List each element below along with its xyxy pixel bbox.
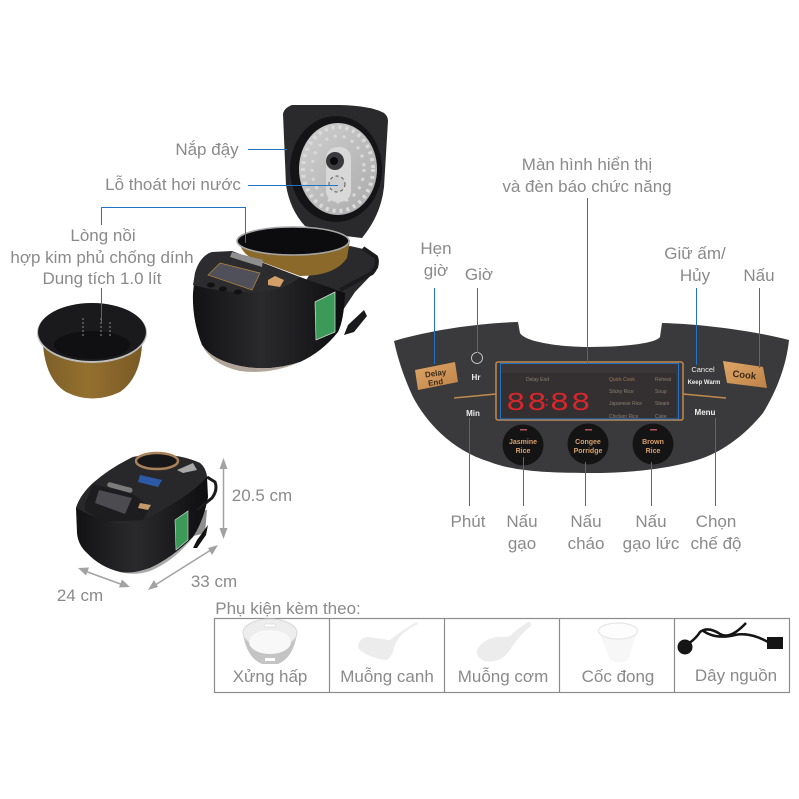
lid ring xyxy=(290,116,382,222)
accessory: power cord xyxy=(678,623,783,685)
heading: display label: Màn hình hiển thị xyxy=(522,155,652,174)
silver lock bar xyxy=(230,252,263,267)
button: delay end xyxy=(415,362,458,390)
label: min: Min xyxy=(466,409,480,418)
rear body xyxy=(300,246,378,310)
button: jasmine rice xyxy=(502,424,544,466)
green sticker xyxy=(175,511,188,550)
button: brown rice: Brown xyxy=(642,439,664,446)
labels: top control labels: Hủy xyxy=(680,266,711,285)
icon: open rice cooker xyxy=(193,105,388,372)
icon: inner pot xyxy=(37,303,147,398)
button: congee porridge: Porridge xyxy=(574,448,602,455)
heading: display label xyxy=(502,155,672,196)
labels: bottom control labels xyxy=(451,512,742,553)
label: inner pot: Lòng nồi xyxy=(70,226,136,245)
labels: top control labels xyxy=(420,239,775,285)
label: steam vent: Lỗ thoát hơi nước xyxy=(105,175,241,194)
label: hr: Hr xyxy=(472,373,480,382)
accessory: power cord: Dây nguồn xyxy=(695,666,777,685)
display labels: Cake xyxy=(655,414,667,420)
accessory: soup ladle: Muỗng canh xyxy=(340,667,434,686)
leader lines: control panel xyxy=(434,198,760,506)
labels: top control labels: giờ xyxy=(424,261,448,280)
display frame xyxy=(496,362,683,420)
seven segment readout: 8 xyxy=(550,388,569,418)
label: inner pot xyxy=(10,226,194,288)
button: delay end: Delay xyxy=(424,368,447,379)
label: lid: Nắp đậy xyxy=(175,140,239,159)
lid plate xyxy=(299,123,377,215)
labels: bottom control labels: Nấu xyxy=(635,512,667,531)
label: cancel: Cancel xyxy=(691,365,715,374)
labels: bottom control labels: cháo xyxy=(568,534,604,553)
body xyxy=(76,455,208,573)
labels: bottom control labels: chế độ xyxy=(690,534,742,553)
heading: accessories: Phụ kiện kèm theo: xyxy=(215,599,361,618)
heading: display label: và đèn báo chức năng xyxy=(502,177,672,196)
panel: control panel xyxy=(394,322,789,473)
labels: top control labels: Giờ xyxy=(465,265,493,284)
display labels: Chicken Rice xyxy=(609,414,639,420)
steam slot xyxy=(177,463,197,473)
display labels: Japanese Rice xyxy=(609,401,642,407)
side metal and plug xyxy=(190,510,207,537)
accessory: rice paddle: Muỗng cơm xyxy=(458,667,548,686)
top shell xyxy=(76,455,207,524)
seven segment readout: 8 xyxy=(571,388,590,418)
display labels: Quick Cook xyxy=(609,377,635,383)
dimension: width: 24 cm xyxy=(57,586,103,605)
label: menu: Menu xyxy=(695,408,716,417)
button: brown rice: Rice xyxy=(646,448,660,455)
labels: bottom control labels: gạo xyxy=(508,534,536,553)
lid shell xyxy=(283,105,388,238)
button: cook: Cook xyxy=(732,369,757,382)
button: congee porridge: Congee xyxy=(575,439,601,446)
seven segment readout: 8 xyxy=(506,388,525,418)
label: cancel: Keep Warm xyxy=(688,380,720,386)
button: brown rice xyxy=(632,424,674,464)
knob xyxy=(136,453,178,469)
seven segment readout: 8 xyxy=(527,388,547,418)
dimension: length: 33 cm xyxy=(191,572,237,591)
dimension: height: 20.5 cm xyxy=(232,486,292,505)
main body xyxy=(193,252,345,368)
leader lines: left labels xyxy=(102,150,338,322)
label: cancel xyxy=(688,365,720,386)
brand badge xyxy=(138,475,162,487)
labels: top control labels: Hẹn xyxy=(420,239,452,258)
accessory: steamer: Xửng hấp xyxy=(233,667,307,686)
top control panel xyxy=(193,251,300,292)
icon: closed rice cooker xyxy=(76,453,216,574)
label: inner pot: hợp kim phủ chống dính xyxy=(10,248,194,267)
gold button xyxy=(138,503,151,510)
display labels: Steam xyxy=(655,401,669,407)
labels: bottom control labels: Chọn xyxy=(696,512,736,531)
handle xyxy=(197,477,216,510)
button: jasmine rice: Jasmine xyxy=(509,439,537,446)
labels: top control labels: Giữ ấm/ xyxy=(664,244,726,263)
dimension arrows xyxy=(78,458,228,590)
pot rim xyxy=(237,227,349,255)
labels: top control labels: Nấu xyxy=(743,266,775,285)
button: jasmine rice: Rice xyxy=(516,448,530,455)
labels: bottom control labels: Phút xyxy=(451,512,486,531)
display labels xyxy=(526,377,672,420)
accessory: steamer xyxy=(233,619,307,686)
label: inner pot: Dung tích 1.0 lít xyxy=(42,269,162,288)
silver latch xyxy=(107,482,133,493)
label: hr xyxy=(472,352,482,382)
button: delay end: End xyxy=(428,377,444,388)
display labels: Soup xyxy=(655,389,667,395)
front panel xyxy=(85,484,150,522)
inner pot gold xyxy=(240,240,350,276)
accessory: soup ladle xyxy=(340,622,434,686)
accessory: rice paddle xyxy=(458,622,548,686)
accessory: measuring cup: Cốc đong xyxy=(582,667,654,686)
button: congee porridge xyxy=(568,424,608,464)
labels: bottom control labels: Nấu xyxy=(570,512,602,531)
display labels: Reheat xyxy=(655,377,672,383)
green sticker xyxy=(315,292,335,340)
labels: bottom control labels: gạo lức xyxy=(623,534,680,553)
display labels: Sticky Rice xyxy=(609,389,634,395)
accessory: measuring cup xyxy=(582,623,654,686)
handle xyxy=(340,248,377,290)
button: cook xyxy=(723,361,767,388)
display labels: Delay End xyxy=(526,377,549,383)
labels: bottom control labels: Nấu xyxy=(506,512,538,531)
table: accessories xyxy=(214,618,790,692)
display colon xyxy=(546,399,548,406)
